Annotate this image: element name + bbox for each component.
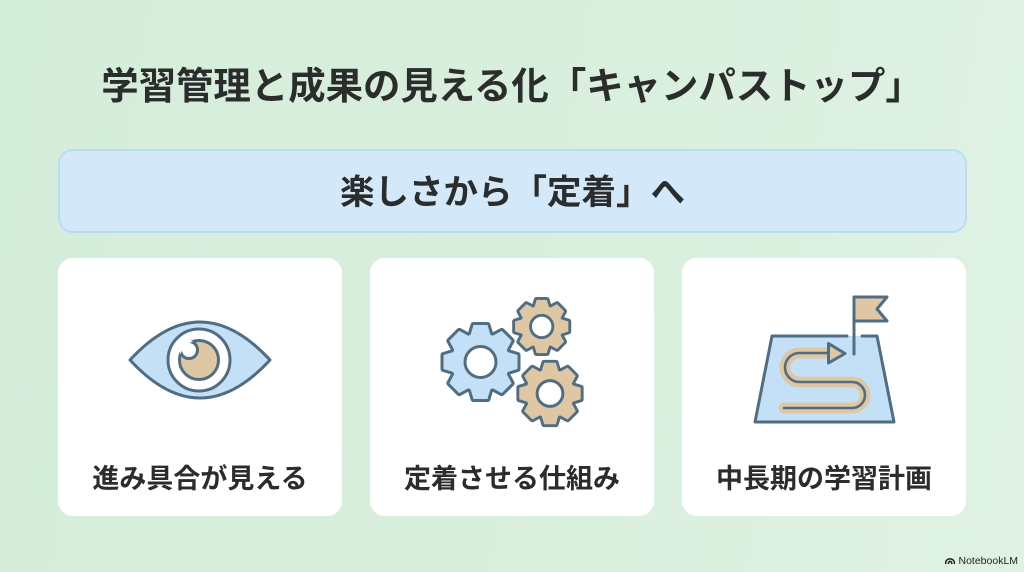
gear: tan top: [515, 300, 568, 353]
icon: gears: [444, 300, 581, 424]
logo: NotebookLM mark: [946, 559, 954, 564]
panel: plan: [682, 258, 966, 516]
banner: 楽しさから定着へ: [58, 149, 967, 233]
panel: mechanism: [370, 258, 654, 516]
panel: progress: [58, 258, 342, 516]
icon: eye: [130, 322, 270, 398]
icon: route map with flag: [755, 297, 894, 422]
label: progress: 進み具合が見える: [92, 464, 308, 494]
label: mechanism: 定着させる仕組み: [404, 464, 620, 494]
gear: blue: [444, 325, 518, 399]
banner text: 楽しさから「定着」へ: [340, 174, 685, 212]
label: plan: 中長期の学習計画: [716, 464, 932, 494]
title: 学習管理と成果の見える化「キャンパストップ」: [101, 65, 923, 107]
footer: NotebookLM: NotebookLM: [958, 555, 1018, 567]
gear: tan bottom: [519, 363, 581, 424]
